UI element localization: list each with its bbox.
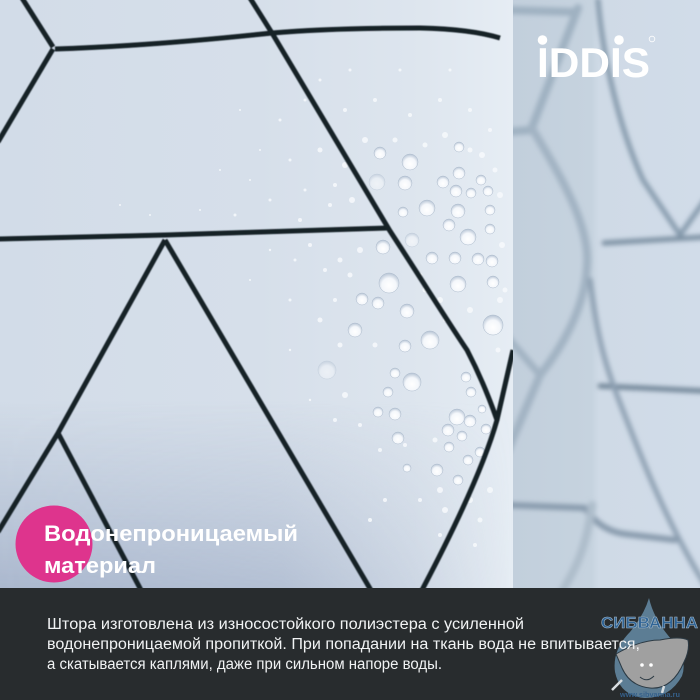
description text <box>47 616 640 673</box>
fabric surface <box>0 0 513 590</box>
pink circle accent <box>16 506 92 582</box>
panel: curtain fabric with water drops <box>0 0 513 592</box>
panel: dark description band <box>0 588 700 700</box>
website: www.sibvanna.ru <box>619 692 680 699</box>
logo: iddis: IDDIS <box>537 39 650 86</box>
background: blurred curtain fold <box>505 0 700 595</box>
brand name: СИБВАННА <box>601 615 698 632</box>
description text: а скатывается каплями, даже при сильном напоре воды. <box>47 656 442 673</box>
heading: Водонепроницаемый <box>44 521 298 546</box>
icon: bathtub mascot <box>612 638 688 693</box>
water drops: small <box>119 68 508 547</box>
water drops: large <box>318 142 503 485</box>
heading <box>44 521 298 578</box>
icon: water drop <box>615 598 684 698</box>
heading: материал <box>44 553 156 578</box>
geometric black line pattern <box>0 0 513 592</box>
watermark: sibvanna logo <box>601 598 698 699</box>
description text: Штора изготовлена из износостойкого полиэстера с усиленной <box>47 616 524 633</box>
description text: водонепроницаемой пропиткой. При попадании на ткань вода не впитывается, <box>47 636 640 653</box>
